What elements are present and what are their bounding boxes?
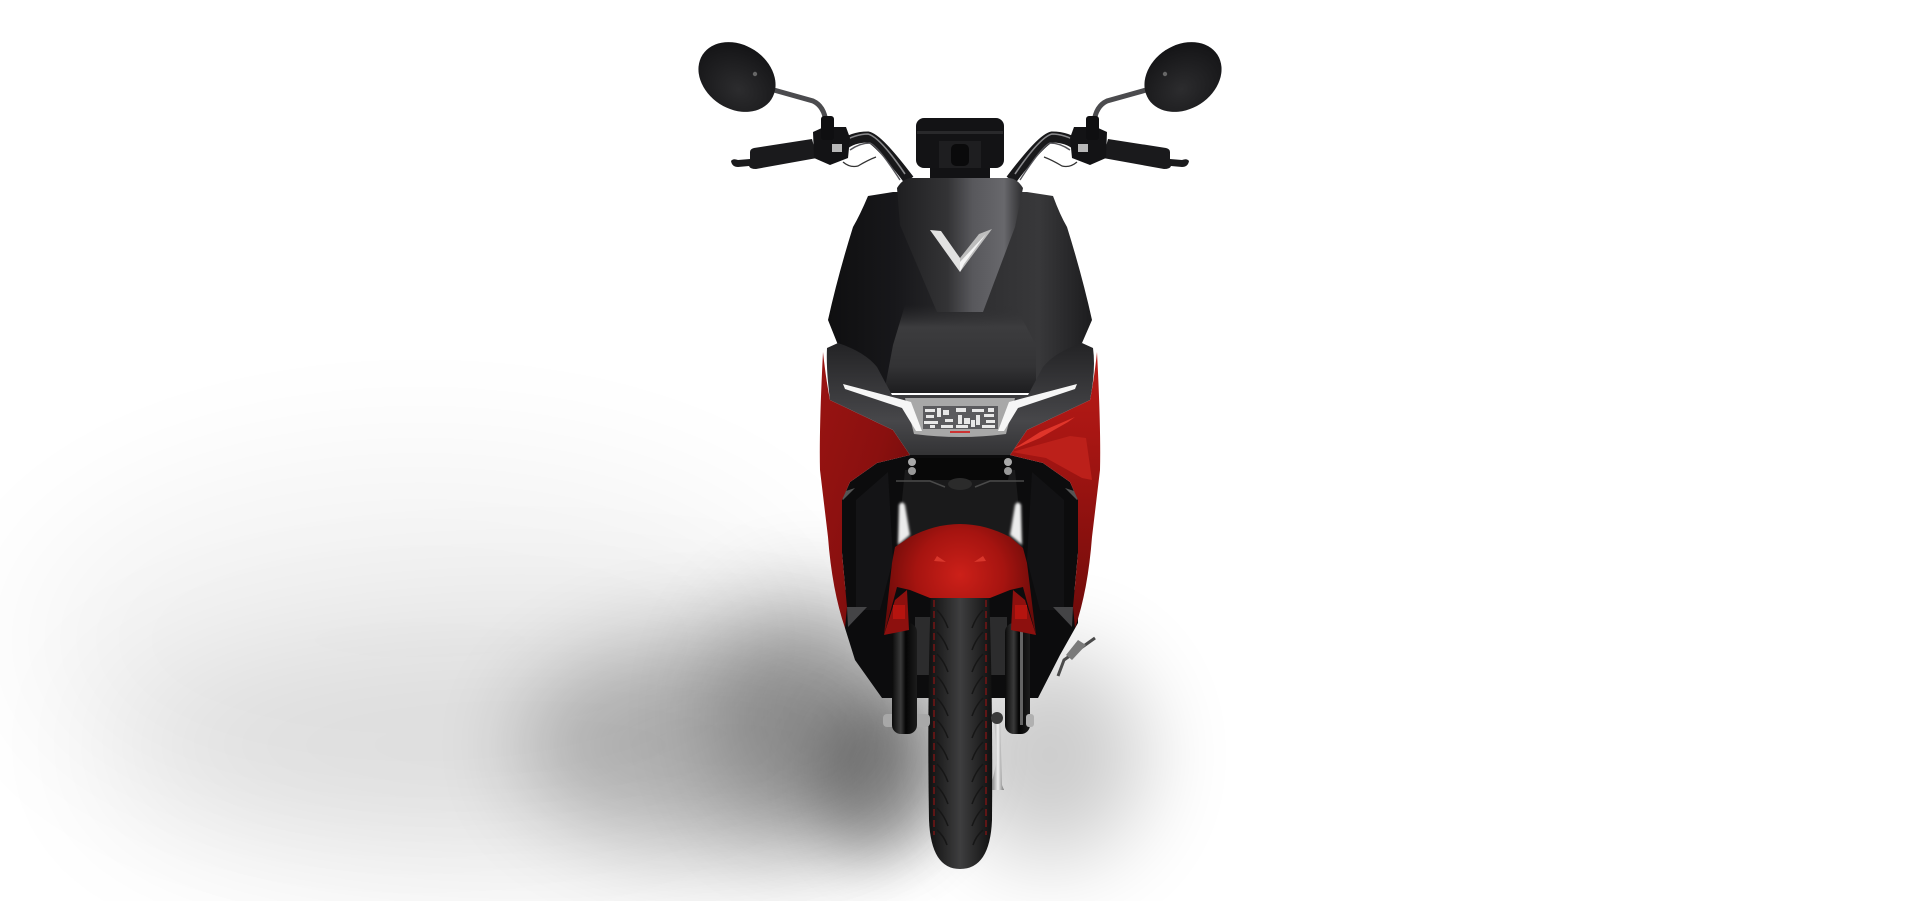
- left handlebar and mirror: [685, 28, 909, 180]
- switch housing: [813, 127, 850, 165]
- mirror stalk: [756, 85, 826, 122]
- right DRL strip: [998, 384, 1077, 431]
- fork legs and axle: [883, 623, 1034, 790]
- mirror housing: [685, 28, 789, 126]
- V chrome logo: [930, 229, 992, 272]
- headlight unit: [843, 384, 1077, 437]
- handlebar tubes: [842, 137, 909, 180]
- hand grip: [731, 139, 817, 169]
- right red side panel: [1010, 352, 1100, 628]
- windscreen visor: [897, 178, 1023, 312]
- grey under-body blocks: [915, 617, 1007, 675]
- ground shadow: [20, 450, 1145, 870]
- front wheel and tire: [928, 590, 992, 869]
- left DRL strip: [843, 384, 922, 431]
- headlight lens: [923, 406, 998, 429]
- shield lit center panel: [884, 305, 1036, 393]
- lower black body: [845, 590, 1078, 698]
- kickstand: [1058, 638, 1095, 676]
- right handlebar and mirror: [1011, 28, 1235, 180]
- left red side panel: [820, 352, 910, 628]
- nose panel surround: [827, 343, 1094, 455]
- instrument display: [916, 118, 1004, 180]
- upper front shield: [828, 192, 1092, 393]
- brake cable: [843, 157, 876, 166]
- red front fender: [884, 524, 1036, 635]
- inner dark cavity: [842, 455, 1078, 628]
